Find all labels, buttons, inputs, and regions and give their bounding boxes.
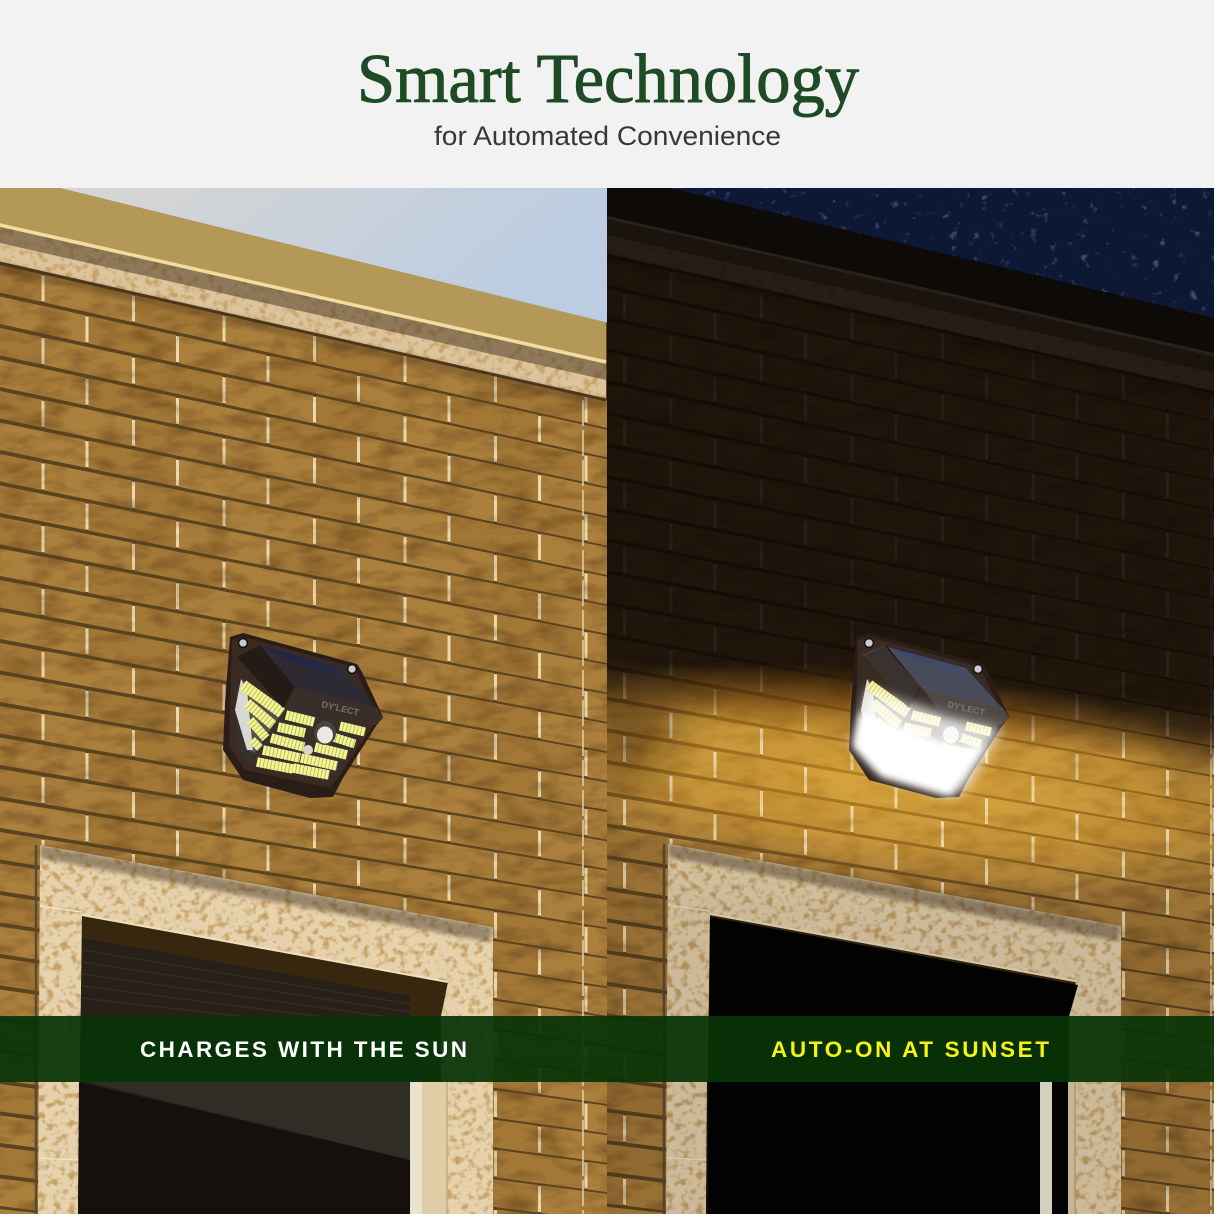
window frame: night [1040,1082,1052,1214]
title: Smart Technology [357,41,859,118]
building scene: night [588,177,1214,1214]
icon: solar wall light lit [849,633,1009,798]
label: auto-on at sunset: AUTO-ON AT SUNSET [771,1037,1049,1062]
darkness overlay [607,188,1214,1214]
subtitle: for Automated Convenience [434,121,781,151]
panel: daytime brick wall [0,180,620,1214]
label: charges with the sun: CHARGES WITH THE SUN [140,1037,467,1062]
sky: daytime [60,188,607,322]
roof: night [607,188,1214,353]
header background [0,0,1214,188]
banner [0,1016,1214,1082]
lamp bright light [852,645,1009,797]
panel: night brick wall [588,177,1214,1214]
window interior: night [708,917,1078,1214]
building scene: daytime [0,180,620,1214]
icon: solar wall light unlit [223,633,383,798]
wall light glow [607,666,1214,892]
night sky [670,188,1214,318]
shaded edges of glow [590,690,1214,780]
